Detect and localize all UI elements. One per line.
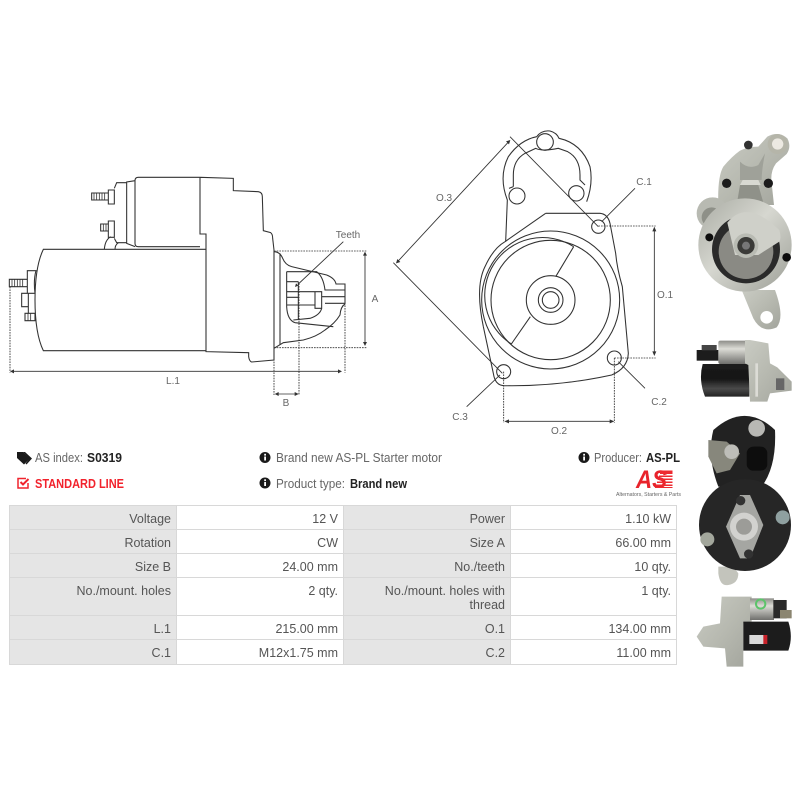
logo: AS: Alternators, Starters & Parts xyxy=(616,492,682,498)
label: O.1: O.1 xyxy=(657,290,673,301)
icon: tags xyxy=(17,452,32,464)
housing xyxy=(200,177,274,362)
side view drawing of starter xyxy=(9,177,367,396)
product type value: Brand new xyxy=(350,477,407,491)
specification table: C.2 xyxy=(486,646,505,660)
logo: AS xyxy=(616,466,682,498)
row: mount holes: No./mount. holes xyxy=(76,584,171,598)
label: C.1: C.1 xyxy=(636,177,652,188)
holes xyxy=(592,220,605,233)
dimension lines xyxy=(10,251,367,395)
specification table: Power xyxy=(470,512,505,526)
specification table: 11.00 mm xyxy=(616,646,671,660)
standard line text: STANDARD LINE xyxy=(35,477,124,491)
row: voltage: Voltage xyxy=(129,512,171,526)
icon: info xyxy=(260,478,270,488)
solenoid xyxy=(114,177,200,247)
front view drawing of starter xyxy=(393,131,656,423)
label: O.2: O.2 xyxy=(551,426,567,437)
specification table: 1 qty. xyxy=(641,584,671,598)
rear bracket xyxy=(503,131,591,242)
logo: AS: AS xyxy=(635,466,667,494)
label: C.2: C.2 xyxy=(651,397,667,408)
row: rotation: Rotation xyxy=(124,536,171,550)
row: mount holes xyxy=(10,578,176,615)
product type label: Product type: xyxy=(276,477,345,491)
specification table: 134.00 mm xyxy=(608,622,671,636)
specification table: 2 qty. xyxy=(308,584,338,598)
producer label: Producer: xyxy=(594,451,642,465)
label: C.3: C.3 xyxy=(452,412,468,423)
index value: S0319 xyxy=(87,451,122,465)
row: l1: L.1 xyxy=(154,622,171,636)
index label: AS index: xyxy=(35,451,83,465)
icon: checked box xyxy=(18,478,28,488)
row: l1 xyxy=(10,616,176,639)
specification table: 66.00 mm xyxy=(615,536,671,550)
producer value: AS-PL xyxy=(646,451,680,465)
specification table: 12 V xyxy=(312,512,338,526)
specification table: No./mount. holes with xyxy=(385,584,505,598)
motor body xyxy=(35,249,206,351)
row: c1: C.1 xyxy=(152,646,171,660)
specification table: 24.00 mm xyxy=(282,560,338,574)
photo: starter front with bracket xyxy=(697,134,792,329)
specification table: CW xyxy=(317,536,338,550)
photo: starter side view 1 xyxy=(697,340,792,402)
specification table xyxy=(9,505,677,665)
mounting flange outline xyxy=(483,213,628,386)
nose cone xyxy=(274,252,345,348)
terminals xyxy=(9,190,118,321)
specification table: M12x1.75 mm xyxy=(259,646,338,660)
row: voltage xyxy=(10,506,176,529)
label: Teeth: Teeth xyxy=(336,230,360,241)
specification table: No./teeth xyxy=(454,560,505,574)
label: L.1: L.1 xyxy=(166,376,180,387)
icon: info xyxy=(260,452,270,463)
dimensions xyxy=(504,226,656,423)
row: size b: Size B xyxy=(135,560,171,574)
row: size b xyxy=(10,554,176,577)
specification table: 10 qty. xyxy=(634,560,671,574)
specification table: thread xyxy=(470,598,505,612)
label: O.3: O.3 xyxy=(436,193,452,204)
icon: info xyxy=(578,452,590,463)
row: c1 xyxy=(10,640,176,664)
brand new text: Brand new AS-PL Starter motor xyxy=(276,451,442,465)
specification table: 215.00 mm xyxy=(275,622,338,636)
specification table: Size A xyxy=(470,536,505,550)
photo: starter rear view xyxy=(699,416,791,585)
label: A: A xyxy=(372,294,379,305)
specification table: 1.10 kW xyxy=(625,512,671,526)
row: rotation xyxy=(10,530,176,553)
label: B: B xyxy=(283,398,290,409)
photo: starter side view 2 xyxy=(697,597,792,667)
concentric circles xyxy=(482,231,620,369)
specification table: O.1 xyxy=(485,622,505,636)
